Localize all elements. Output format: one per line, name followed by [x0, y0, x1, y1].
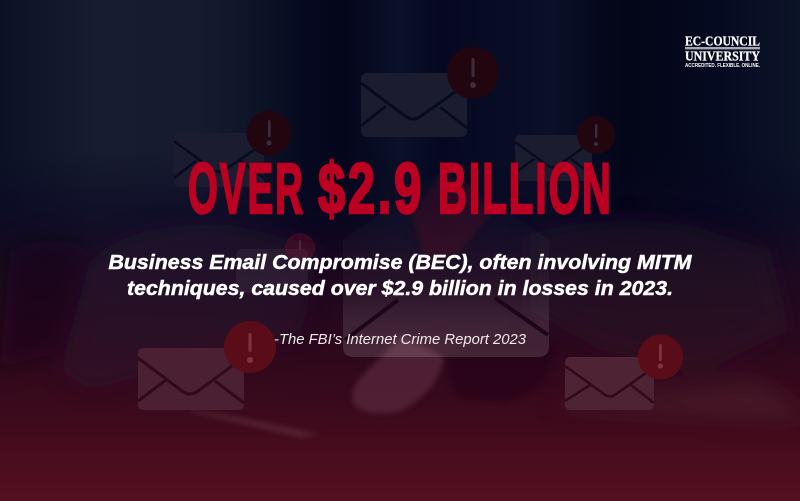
- icon: envelope alert bottom left: [138, 321, 276, 410]
- blurred background: pressing finger: [352, 335, 445, 414]
- logo: EC-Council University: EC-COUNCIL: [685, 34, 760, 48]
- icon: central large open envelope: [343, 168, 549, 357]
- statement text: Business Email Compromise (BEC), often involving MITM: [108, 251, 692, 274]
- icon: envelope alert top left: [174, 110, 292, 187]
- title: BILLION: [438, 150, 613, 229]
- logo: EC-Council University: [685, 34, 760, 69]
- logo: EC-Council University: UNIVERSITY: [685, 48, 760, 64]
- statement text: techniques, caused over $2.9 billion in losses in 2023.: [127, 277, 673, 300]
- title: [188, 150, 613, 229]
- blurred background: hands on keyboard: [0, 220, 800, 420]
- blurred background: keyboard highlight: [190, 410, 320, 437]
- logo: EC-Council University: ACCREDITED. FLEXIBLE. ONLINE.: [685, 63, 760, 69]
- icon: envelope alert top centre: [361, 47, 499, 137]
- citation: -The FBI’s Internet Crime Report 2023: [274, 332, 526, 348]
- icon: envelope alert top right: [515, 116, 615, 181]
- title: $2.9: [318, 150, 424, 229]
- icon: small envelope behind the text: [236, 233, 315, 293]
- statement text: [108, 251, 692, 300]
- icon: envelope alert bottom right: [565, 334, 683, 410]
- blurred background: hand shadow near finger: [445, 330, 555, 402]
- title: OVER: [188, 150, 305, 229]
